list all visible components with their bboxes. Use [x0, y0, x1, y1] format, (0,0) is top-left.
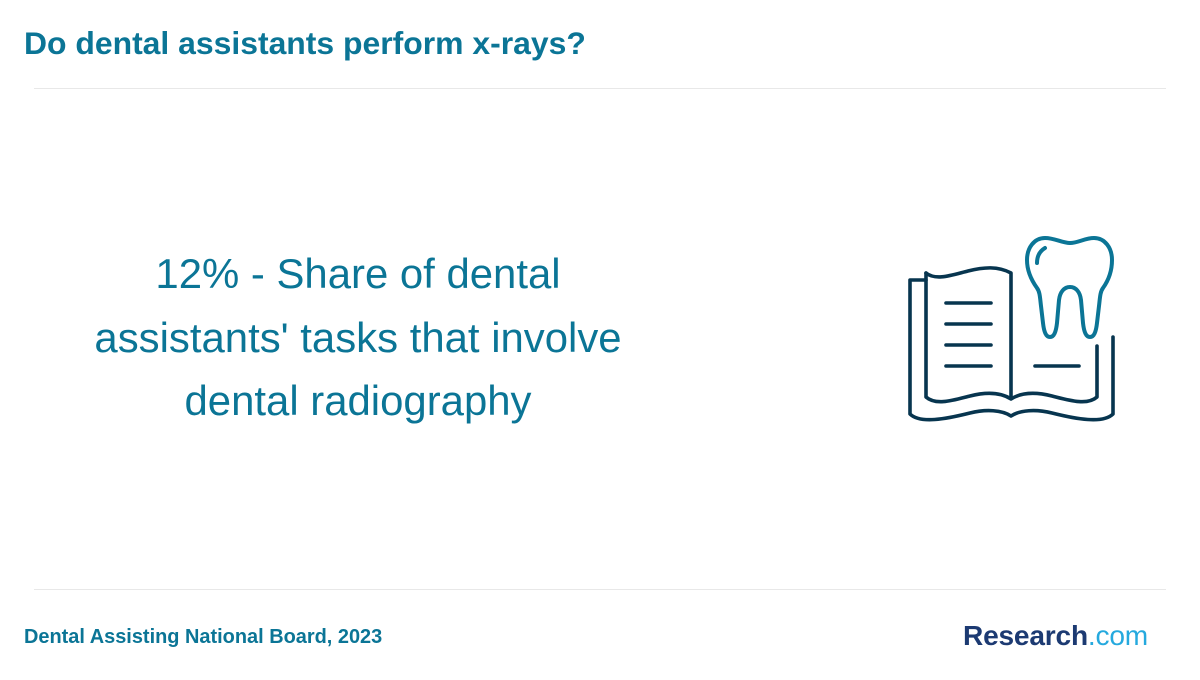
- title: Do dental assistants perform x-rays?: [24, 25, 586, 61]
- statistic text: 12% - Share of dental: [155, 250, 561, 297]
- logo: Research.com: [963, 620, 1148, 651]
- statistic text: [94, 250, 622, 424]
- icon: open book with tooth: [908, 236, 1115, 422]
- statistic text: assistants' tasks that involve: [94, 314, 622, 360]
- source: Dental Assisting National Board, 2023: [24, 626, 382, 648]
- statistic text: dental radiography: [184, 377, 532, 424]
- icon: tooth: [1027, 238, 1112, 337]
- icon: book: [910, 268, 1113, 420]
